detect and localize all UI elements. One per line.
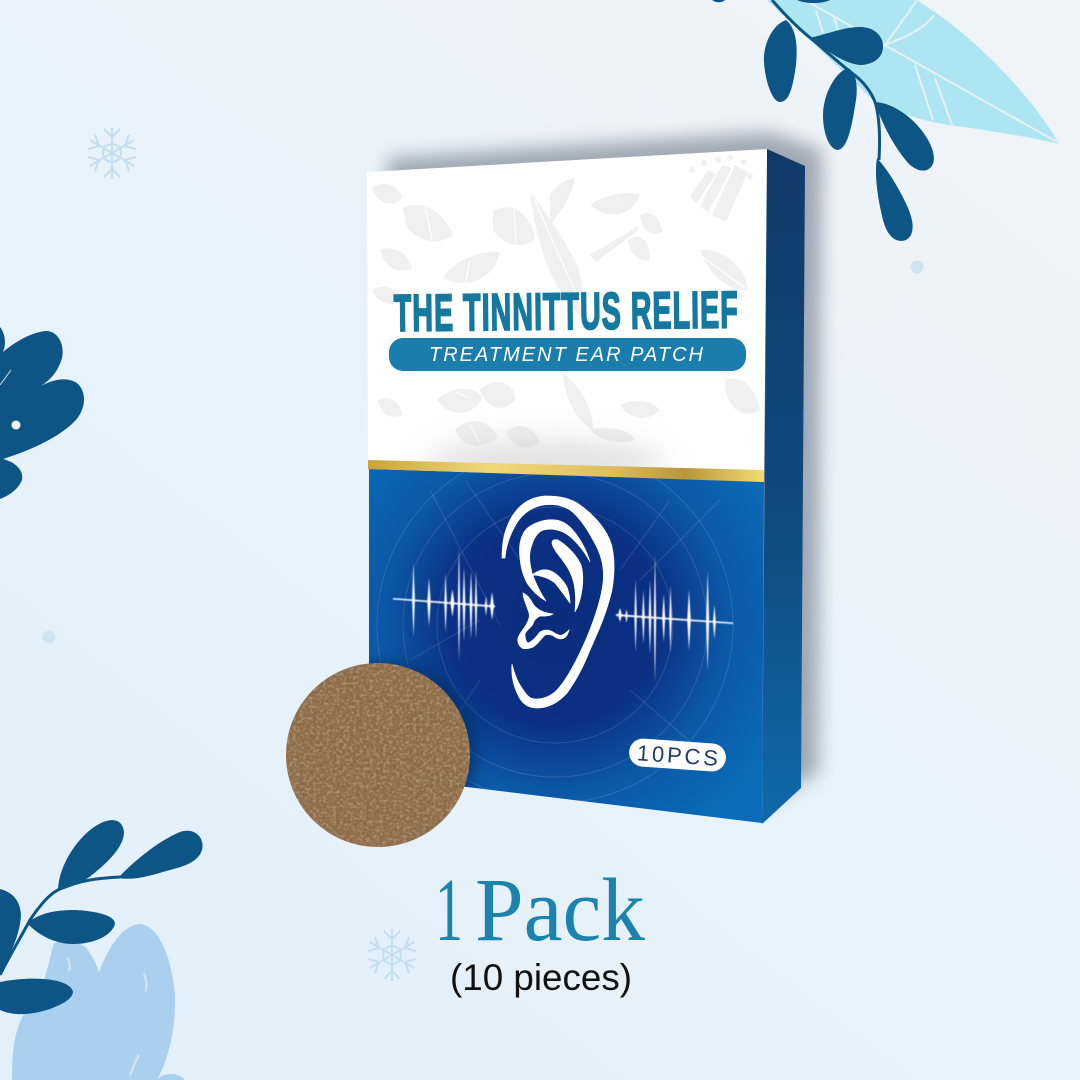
- snowflake top left: [88, 127, 136, 179]
- radial line pattern: [377, 447, 733, 803]
- snowflake bottom: [368, 929, 416, 981]
- box title: THE TINNITTUS RELIEF: [394, 280, 739, 342]
- pale blue plant shape: [12, 924, 185, 1080]
- floral watermark: [372, 155, 760, 447]
- box shadow: [388, 132, 822, 800]
- sound wave right: [616, 554, 733, 682]
- decorative dot left: [42, 630, 56, 644]
- product box: [367, 132, 822, 824]
- ear icon: [502, 496, 614, 708]
- subtitle pill: TREATMENT EAR PATCH: [429, 344, 704, 366]
- box side panel: [762, 149, 805, 824]
- stem: [0, 877, 120, 975]
- 10PCS badge: 10PCS: [636, 740, 719, 771]
- white front panel: [367, 149, 767, 484]
- stem: [772, 0, 880, 160]
- pack title: 1: [435, 861, 463, 960]
- subtitle pill: [389, 338, 746, 371]
- lower panel haze: [428, 432, 662, 467]
- dark leaves: [712, 0, 934, 241]
- pack count: (10 pieces): [450, 957, 632, 998]
- pack title: Pack: [475, 861, 645, 960]
- sound wave left: [393, 547, 495, 661]
- bottom left foliage: [0, 820, 203, 1080]
- blue front panel: [369, 447, 764, 823]
- brown round patch: [286, 663, 470, 847]
- gold band: [368, 460, 764, 482]
- dark leaves: [0, 820, 203, 1014]
- top right foliage: [712, 0, 1059, 241]
- large pale leaf: [767, 0, 1059, 144]
- patch shadow on box: [369, 655, 482, 788]
- decorative dot right: [910, 260, 924, 274]
- left foliage: [0, 327, 84, 499]
